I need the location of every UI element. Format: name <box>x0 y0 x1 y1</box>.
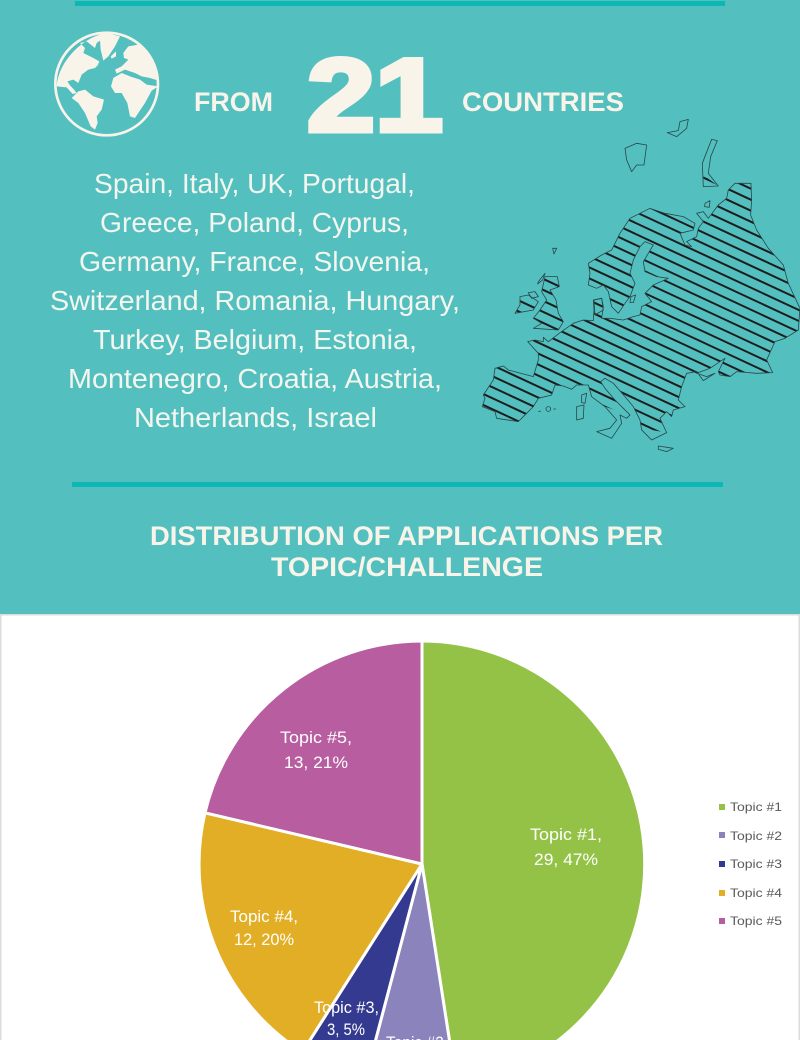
heading <box>150 521 663 582</box>
pie labels: Topic #5, <box>280 729 352 747</box>
text block: country list: Spain, Italy, UK, Portugal, <box>94 168 415 199</box>
legend: Topic #2 <box>730 829 782 843</box>
text block: country list: Turkey, Belgium, Estonia, <box>93 324 417 355</box>
pie labels: 29, 47% <box>534 851 598 869</box>
text block: country list: Germany, France, Slovenia, <box>79 246 430 277</box>
pie labels: 13, 21% <box>284 754 348 772</box>
pie labels: Topic #1, <box>530 826 602 844</box>
heading: DISTRIBUTION OF APPLICATIONS PER <box>150 521 663 551</box>
icon: globe <box>55 33 159 135</box>
pie labels: Topic #4, <box>230 908 298 926</box>
text block: country list: Netherlands, Israel <box>134 402 377 433</box>
label: COUNTRIES: COUNTRIES <box>462 87 624 117</box>
text block: country list <box>50 168 460 433</box>
legend: Topic #1 <box>730 800 782 814</box>
pie labels <box>230 729 602 1040</box>
text block: country list: Montenegro, Croatia, Austria, <box>68 363 442 394</box>
pie labels: 3, 5% <box>327 1021 365 1039</box>
pie labels: 12, 20% <box>234 931 294 949</box>
label: FROM: FROM <box>194 87 273 117</box>
text block: country list: Greece, Poland, Cyprus, <box>100 207 409 238</box>
panel: pie chart <box>0 614 800 1040</box>
pie chart <box>199 641 645 1040</box>
text block: country list: Switzerland, Romania, Hungary, <box>50 285 460 316</box>
legend <box>719 800 782 928</box>
legend: Topic #5 <box>730 914 782 928</box>
legend: Topic #4 <box>730 886 782 900</box>
big number 21: 21 <box>307 38 443 154</box>
heading: TOPIC/CHALLENGE <box>271 552 543 582</box>
legend: Topic #3 <box>730 857 782 871</box>
pie labels: Topic #3, <box>314 999 379 1017</box>
map: Europe with diagonal hatching <box>482 118 800 452</box>
